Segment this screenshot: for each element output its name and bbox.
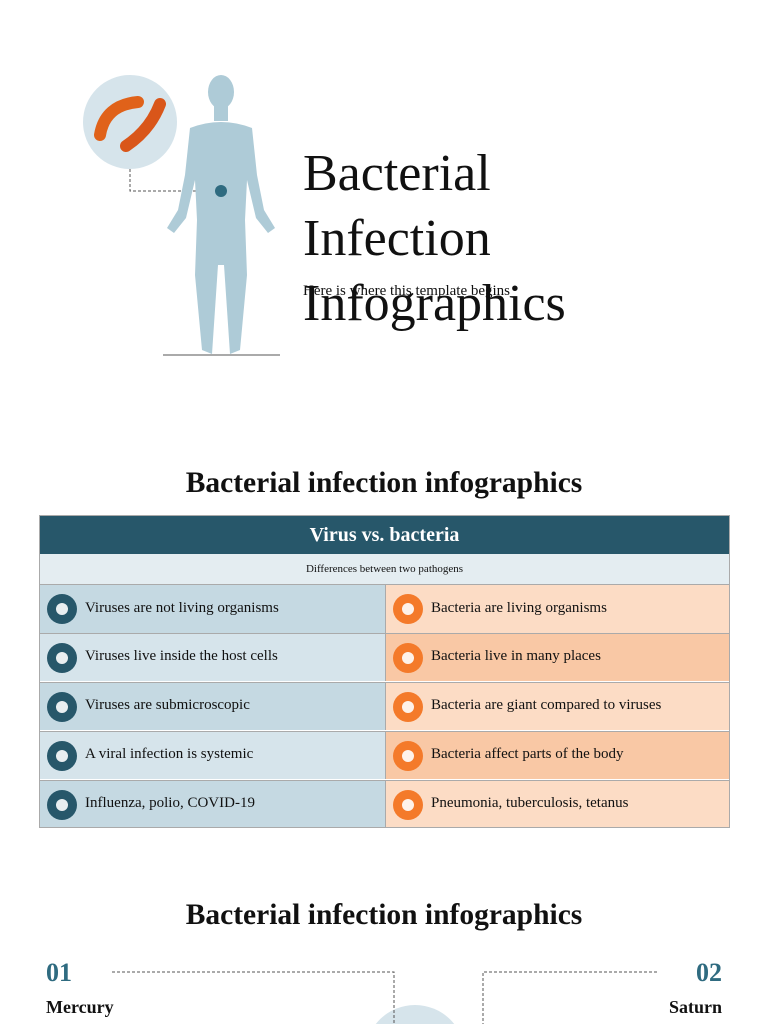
table subheader: Differences between two pathogens (306, 563, 463, 575)
right column (385, 585, 729, 827)
table header: Virus vs. bacteria (310, 524, 459, 546)
table: Viruses are not living organisms (85, 600, 279, 616)
title: Bacterial (303, 145, 491, 202)
item 02 (669, 958, 722, 1017)
section heading 2: Bacterial infection infographics (186, 899, 582, 931)
organ dot (215, 185, 227, 197)
left column (40, 585, 385, 827)
section heading 1: Bacterial infection infographics (186, 467, 582, 499)
table: Bacteria are living organisms (431, 600, 607, 616)
table: Bacteria live in many places (431, 648, 601, 664)
table: Pneumonia, tuberculosis, tetanus (431, 795, 628, 811)
table: Bacteria affect parts of the body (431, 746, 624, 762)
table: A viral infection is systemic (85, 746, 253, 762)
table: Influenza, polio, COVID-19 (85, 795, 255, 811)
item 02: Saturn (669, 997, 722, 1017)
bacteria circle (83, 75, 177, 169)
table subheader (40, 554, 729, 585)
bottom diagram (112, 972, 657, 1024)
title: Infection (303, 210, 491, 267)
item 01: 01 (46, 958, 72, 987)
title (303, 145, 566, 332)
item 02: 02 (696, 958, 722, 987)
subtitle: Here is where this template begins (303, 283, 510, 299)
title: Infographics (303, 275, 566, 332)
item 01 (46, 958, 114, 1017)
table (39, 515, 730, 828)
dashed connector (130, 169, 215, 191)
table: Bacteria are giant compared to viruses (431, 697, 661, 713)
table: Viruses live inside the host cells (85, 648, 278, 664)
table: Viruses are submicroscopic (85, 697, 250, 713)
item 01: Mercury (46, 997, 114, 1017)
hero illustration (83, 75, 280, 356)
table header (40, 516, 729, 554)
body silhouette (167, 75, 275, 354)
